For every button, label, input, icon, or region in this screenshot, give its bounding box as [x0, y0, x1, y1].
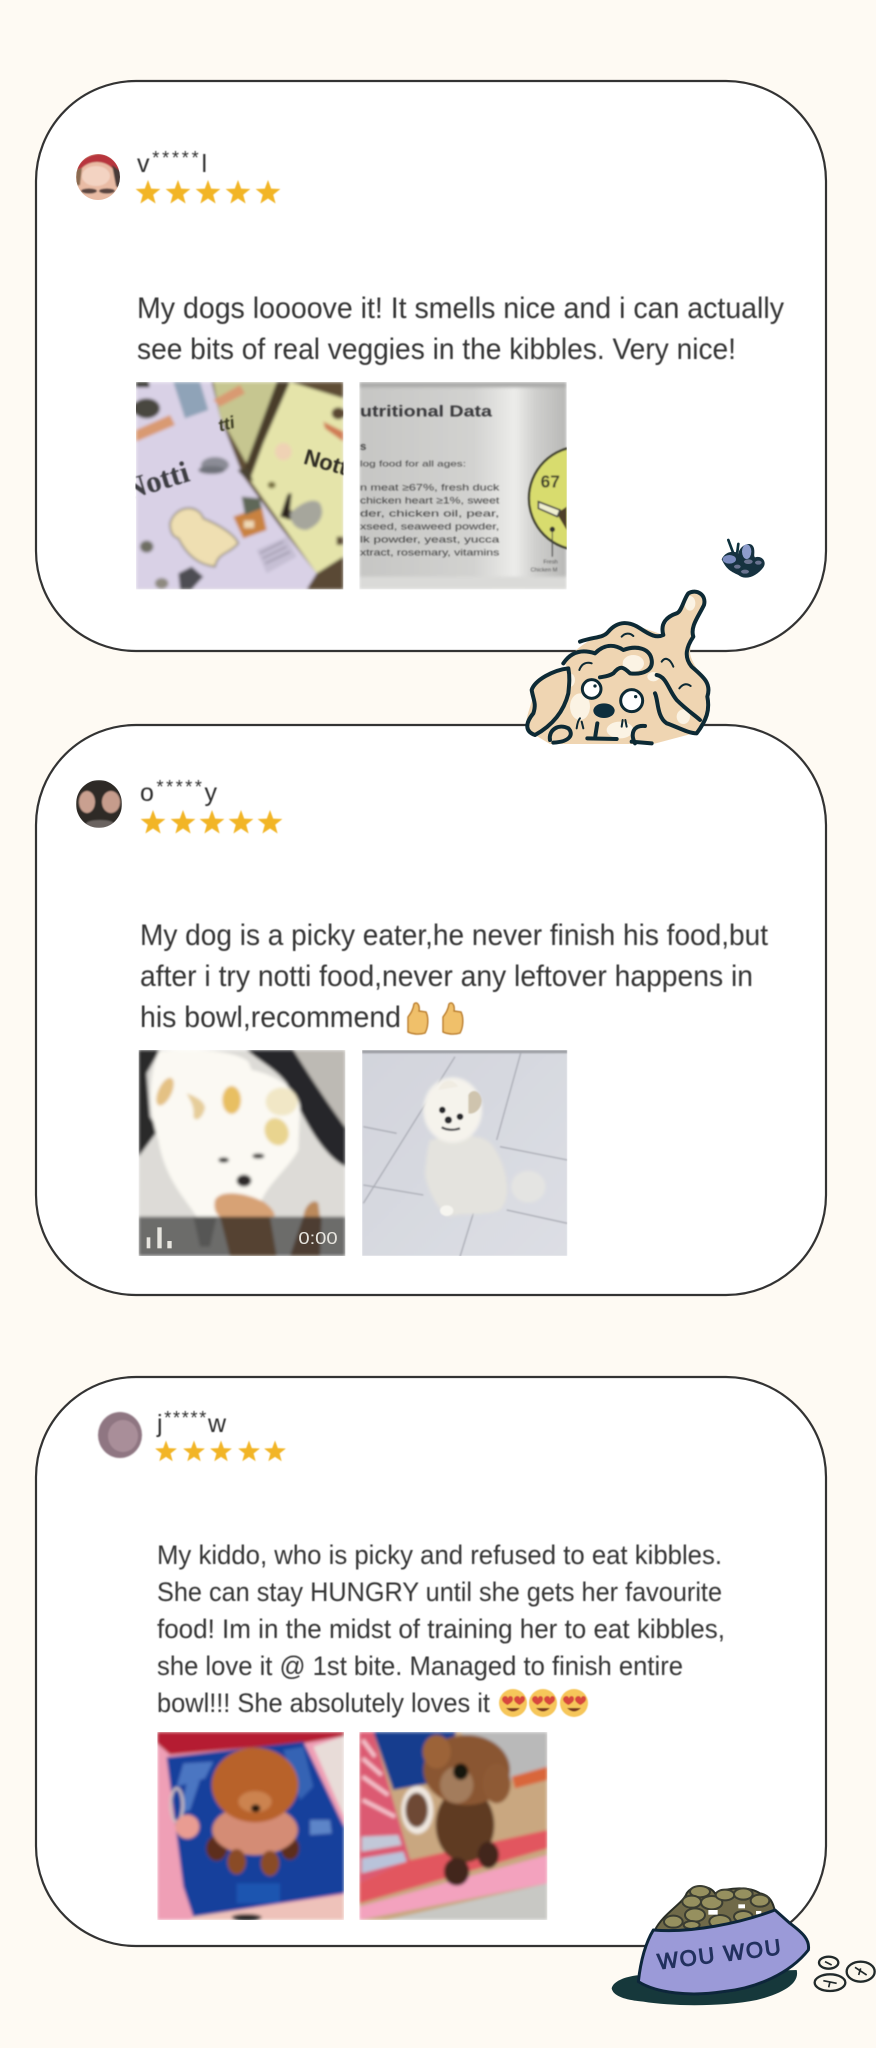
panel: review three [36, 1377, 826, 1946]
bowl shadow [612, 1970, 797, 2005]
photo: nutritional data label [359, 382, 567, 590]
star rating [141, 810, 282, 834]
star rating [136, 180, 280, 204]
review text: My kiddo, who is picky and refused to eat kibbles. [157, 1540, 722, 1570]
review text: My dog is a picky eater,he never finish his food,but [140, 919, 769, 952]
reviewer name: ***** [156, 777, 202, 797]
photo: notti food bags: Notti [120, 455, 194, 507]
reviewer name: v [137, 150, 150, 178]
photo: notti food bags: Notti [301, 444, 356, 482]
photo: nutritional data label: xtract, rosemary, vitamins [360, 548, 500, 558]
photo: pomeranian sitting on tile [362, 1050, 567, 1257]
review text [137, 292, 784, 366]
photo: nutritional data label: Chicken M [531, 567, 558, 573]
reviewer name: l [201, 150, 207, 178]
icon: thumbs up emoji pair [408, 1003, 463, 1034]
illustration: food bowl [612, 1886, 809, 2005]
photo: nutritional data label: xseed, seaweed powder, [360, 522, 499, 532]
review text: My dogs loooove it! It smells nice and i can actually [137, 292, 784, 325]
photo: nutritional data label: chicken heart ≥1%, sweet [360, 496, 500, 506]
video duration bar: 0:00 [298, 1228, 338, 1248]
avatar: mauve circle [98, 1412, 142, 1458]
review text [140, 919, 769, 1034]
photo: white pomeranian video still [139, 1050, 345, 1256]
review text: after i try notti food,never any leftover happens in [140, 960, 753, 993]
photo: nutritional data label: der, chicken oil, pear, [360, 509, 499, 519]
photo: nutritional data label: log food for all ages: [360, 458, 466, 468]
icon: scattered kibbles [815, 1957, 875, 1991]
photo: nutritional data label: 67 [541, 471, 560, 491]
photo: nutritional data label: n meat ≥67%, fresh duck [360, 483, 500, 493]
photo: notti food bags [136, 382, 344, 590]
reviewer name: o [140, 779, 154, 807]
illustration: curly dog peeking between panels [526, 592, 709, 744]
panel: review one [36, 81, 826, 651]
photo: nutritional data label: s [360, 441, 366, 453]
avatar: red haired reviewer [76, 154, 120, 200]
photo: notti food bags: tti [216, 412, 238, 436]
review text: food! Im in the midst of training her to eat kibbles, [157, 1614, 725, 1644]
review text: she love it @ 1st bite. Managed to finish entire [157, 1651, 683, 1681]
icon: butterfly [722, 540, 765, 578]
icon: heart eyes emoji trio [499, 1689, 588, 1717]
review text: his bowl,recommend [140, 1001, 401, 1034]
panel: review two [36, 725, 826, 1295]
photo: brown poodle on pink rack [359, 1732, 547, 1920]
reviewer name: ***** [164, 1408, 206, 1428]
photo: nutritional data label: lk powder, yeast, yucca [360, 535, 500, 545]
reviewer name: w [207, 1410, 227, 1438]
reviewer name: ***** [152, 148, 199, 168]
bowl label: WOU WOU [656, 1934, 782, 1974]
video duration bar [147, 1227, 338, 1248]
photo: nutritional data label: Fresh [543, 559, 558, 565]
review text: see bits of real veggies in the kibbles. Very nice! [137, 333, 736, 366]
review text: bowl!!! She absolutely loves it [157, 1688, 490, 1718]
reviewer name: y [204, 779, 218, 807]
reviewer name: j [157, 1410, 163, 1438]
photo: nutritional data label: utritional Data [360, 404, 492, 421]
review text: She can stay HUNGRY until she gets her favourite [157, 1577, 722, 1607]
bowl body [638, 1910, 809, 1994]
star rating [155, 1441, 286, 1461]
kibble pile [655, 1886, 775, 1931]
review text [157, 1540, 725, 1718]
photo: brown poodle on blue mat [157, 1732, 344, 1921]
avatar: dark reviewer photo [76, 780, 122, 828]
